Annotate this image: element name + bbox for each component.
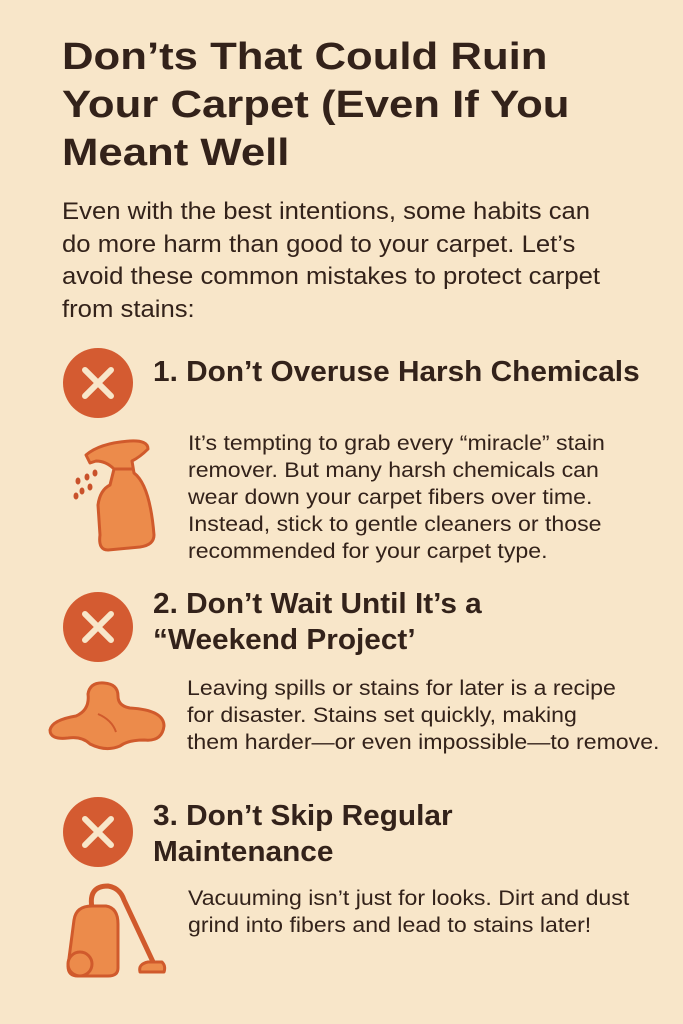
- body 3: grind into fibers and lead to stains later!: [188, 914, 591, 937]
- body 2: [187, 677, 659, 754]
- body 3: [188, 887, 630, 937]
- icon: spill puddle: [48, 681, 166, 750]
- icon: spray bottle: [74, 439, 156, 552]
- icon: vacuum: [66, 884, 166, 978]
- intro text: [62, 198, 600, 323]
- icon: x circle 2: [63, 592, 133, 662]
- icon: x circle 1: [63, 348, 133, 418]
- heading 2: “Weekend Project’: [153, 624, 416, 656]
- body 1: remover. But many harsh chemicals can: [188, 459, 599, 482]
- intro text: do more harm than good to your carpet. Let’s: [62, 231, 575, 258]
- intro text: Even with the best intentions, some habits can: [62, 198, 590, 225]
- heading 2: [153, 588, 482, 656]
- body 2: them harder—or even impossible—to remove.: [187, 731, 659, 754]
- body 1: Instead, stick to gentle cleaners or those: [188, 513, 601, 536]
- body 1: [188, 432, 605, 563]
- heading 3: [153, 800, 453, 868]
- heading 2: 2. Don’t Wait Until It’s a: [153, 588, 482, 620]
- heading 3: 3. Don’t Skip Regular: [153, 800, 453, 832]
- intro text: from stains:: [62, 296, 195, 323]
- body 3: Vacuuming isn’t just for looks. Dirt and dust: [188, 887, 629, 910]
- heading 3: Maintenance: [153, 836, 333, 868]
- title: [62, 36, 569, 174]
- title: Don’ts That Could Ruin: [62, 36, 547, 78]
- title: Your Carpet (Even If You: [62, 84, 569, 126]
- body 1: wear down your carpet fibers over time.: [188, 486, 592, 509]
- title: Meant Well: [62, 132, 289, 174]
- heading 1: 1. Don’t Overuse Harsh Chemicals: [153, 356, 640, 388]
- body 1: It’s tempting to grab every “miracle” stain: [188, 432, 605, 455]
- body 2: for disaster. Stains set quickly, making: [187, 704, 577, 727]
- intro text: avoid these common mistakes to protect carpet: [62, 263, 600, 290]
- body 1: recommended for your carpet type.: [188, 540, 548, 563]
- body 2: Leaving spills or stains for later is a recipe: [187, 677, 616, 700]
- icon: x circle 3: [63, 797, 133, 867]
